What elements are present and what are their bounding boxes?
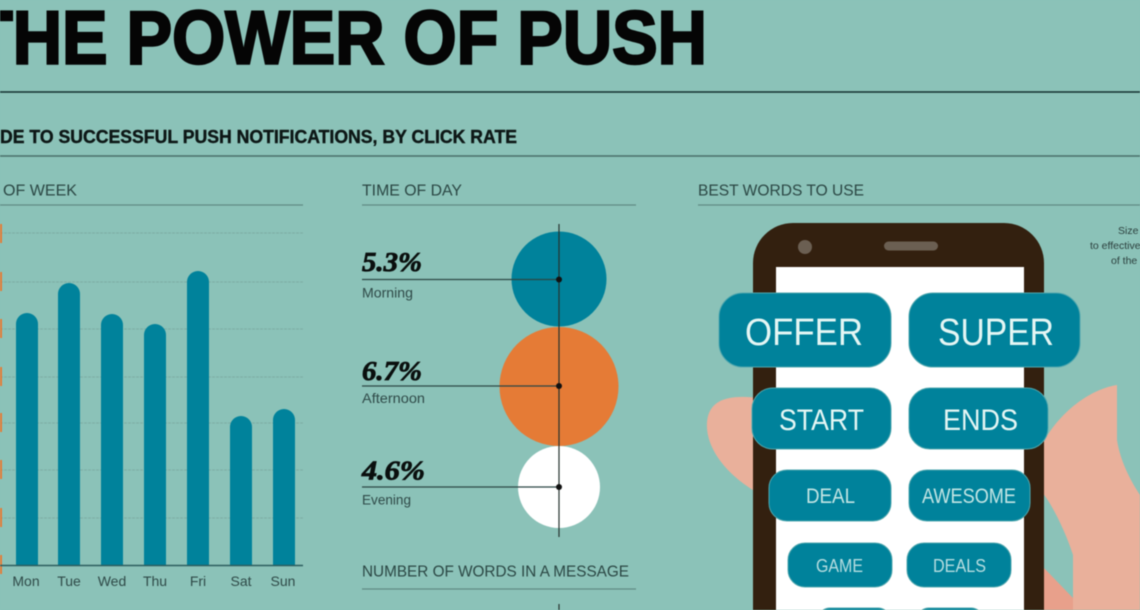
stat: evening xyxy=(361,456,425,508)
size note: to effective xyxy=(1090,240,1140,252)
stat: afternoon xyxy=(362,356,425,406)
stat: evening: 4.6% xyxy=(361,456,425,486)
panel: day of week xyxy=(0,182,303,589)
bar chart xyxy=(16,271,295,565)
subtitle: DE TO SUCCESSFUL PUSH NOTIFICATIONS, BY CLICK RATE xyxy=(0,127,517,147)
day labels: Wed xyxy=(98,573,126,589)
word labels xyxy=(745,312,1054,576)
heading: best words: BEST WORDS TO USE xyxy=(698,182,864,200)
icon: thumb shadow xyxy=(1044,568,1073,610)
stat: morning xyxy=(362,247,422,300)
stat: evening: Evening xyxy=(362,492,411,508)
panel: time of day xyxy=(361,182,636,537)
word pills xyxy=(719,293,1080,610)
day labels: Tue xyxy=(57,573,81,589)
icon: phone xyxy=(753,223,1044,610)
stat: morning: Morning xyxy=(362,284,413,300)
circle: morning xyxy=(512,232,606,326)
heading: time of day: TIME OF DAY xyxy=(362,182,462,200)
day labels: Mon xyxy=(12,573,40,589)
day labels: Thu xyxy=(143,573,167,589)
stat: afternoon: 6.7% xyxy=(362,356,422,386)
stat: afternoon: Afternoon xyxy=(362,390,425,406)
size note xyxy=(1090,225,1140,267)
size note: of the xyxy=(1111,255,1137,267)
size note: Size xyxy=(1118,225,1139,237)
axis ticks xyxy=(0,224,2,574)
word labels: AWESOME xyxy=(922,485,1016,508)
word labels: ENDS xyxy=(943,404,1018,437)
word labels: DEAL xyxy=(806,485,855,508)
icon: left hand xyxy=(707,397,760,494)
stat: morning: 5.3% xyxy=(362,247,422,277)
day labels xyxy=(12,573,295,589)
circle: evening xyxy=(518,446,600,528)
heading: number of words: NUMBER OF WORDS IN A MESSAGE xyxy=(362,564,629,580)
day labels: Sat xyxy=(230,573,252,589)
day labels: Sun xyxy=(271,573,295,589)
icon: right hand xyxy=(1040,385,1140,610)
circle: afternoon xyxy=(500,327,618,446)
word labels: DEALS xyxy=(933,556,986,576)
heading: day of week: OF WEEK xyxy=(3,182,77,200)
word labels: SUPER xyxy=(938,312,1054,354)
word labels: OFFER xyxy=(745,312,863,354)
word labels: START xyxy=(779,404,864,437)
word labels: GAME xyxy=(816,556,863,576)
day labels: Fri xyxy=(190,573,206,589)
panel: best words xyxy=(698,182,1140,610)
